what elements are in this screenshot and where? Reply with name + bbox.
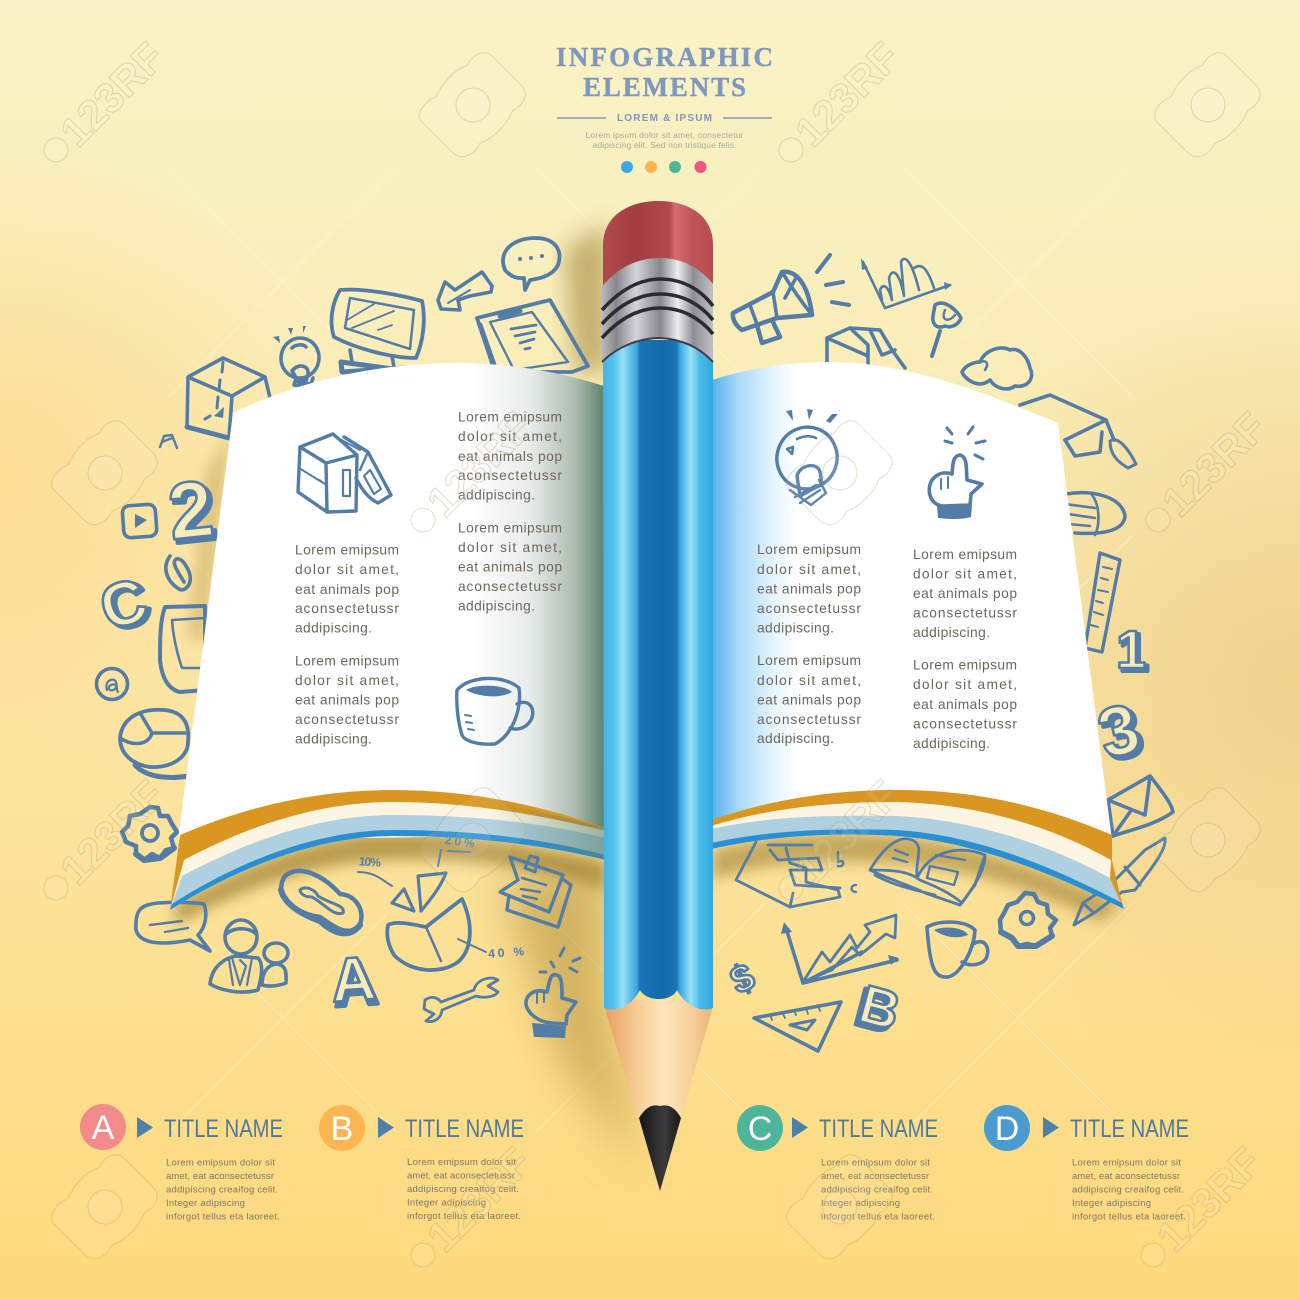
- legend item B: addipiscing creaifog celit.: [407, 1184, 519, 1195]
- icon: ruler: [1085, 553, 1120, 652]
- letter 2: 2: [164, 463, 218, 557]
- icon: graduation cap: [1020, 395, 1136, 468]
- colour dots: [621, 161, 706, 173]
- right page: [712, 362, 1112, 840]
- legend item C: Lorem emipsum dolor sit: [821, 1158, 930, 1168]
- watermarks: 123RF: [786, 33, 908, 156]
- legend item B: Lorem emipsum dolor sit: [407, 1157, 516, 1168]
- legend item C: addipiscing creaifog celit.: [821, 1184, 933, 1196]
- icon: gear: [122, 807, 177, 860]
- legend item A: TITLE NAME: [164, 1115, 283, 1143]
- letter B: B: [849, 977, 902, 1045]
- page text: left column 2: Lorem emipsum: [458, 520, 562, 536]
- page text: right column 1: [757, 542, 861, 746]
- letter 1: 1: [1116, 620, 1146, 680]
- page text: left column 2: Lorem emipsum: [458, 410, 562, 424]
- intro text: adipiscing elit. Sed non tristique felis.: [592, 140, 736, 150]
- labels 10% 20% 40%: 10%: [358, 854, 382, 870]
- legend item D: amet, eat aconsectetussr: [1072, 1171, 1180, 1182]
- icon: stairs block: [736, 842, 840, 907]
- letter 3: 3: [1094, 691, 1151, 776]
- subheading with rules: LOREM & IPSUM: [617, 113, 712, 124]
- legend item B: Integer adipiscing: [407, 1198, 486, 1208]
- page text: left column 2: dolor sit amet,: [458, 429, 562, 444]
- legend item A: amet, eat aconsectetussr: [166, 1171, 274, 1182]
- icon: back arrow: [438, 272, 492, 310]
- icon: books on page: [298, 434, 391, 512]
- doodle icons: left arc: [92, 238, 588, 1038]
- page text: left column 1: Lorem emipsum: [295, 654, 399, 668]
- icon: pie chart: [358, 850, 486, 970]
- watermarks: 123RF: [1148, 1138, 1270, 1261]
- page text: right column 2: Lorem emipsum: [913, 547, 1017, 562]
- page text: left column 1: aconsectetussr: [295, 712, 399, 727]
- page text: left column 1: addipiscing.: [295, 732, 372, 746]
- icon: infinity knot: [281, 871, 361, 933]
- doodle icons: right arc: [724, 255, 1173, 1051]
- page text: left column 2: dolor sit amet,: [458, 540, 562, 555]
- legend item D: Lorem emipsum dolor sit: [1072, 1158, 1181, 1168]
- page text: right column 2: eat animals pop: [913, 586, 1017, 601]
- icon: speech bubble: [503, 238, 559, 290]
- icon: clipboard: [477, 300, 588, 372]
- page text: right column 1: eat animals pop: [757, 692, 861, 708]
- icon: computer mouse: [120, 710, 188, 778]
- page text: left column 2: addipiscing.: [458, 488, 535, 502]
- shadows: [175, 222, 1122, 1170]
- icon: monitor: [332, 290, 424, 372]
- page text: right column 1: aconsectetussr: [757, 712, 861, 727]
- icon: stacked books: [827, 328, 905, 368]
- page text: left column 1: dolor sit amet,: [295, 562, 399, 577]
- icon: hand on page: [929, 427, 985, 519]
- page text: right column 2: [913, 547, 1017, 751]
- icon: play box: [122, 504, 157, 538]
- icon: circled a: [96, 668, 128, 700]
- page text: right column 2: addipiscing.: [913, 736, 990, 751]
- icon: cube: [187, 358, 271, 438]
- page text: right column 2: addipiscing.: [913, 625, 990, 640]
- ferrule: [602, 258, 713, 362]
- page text: right column 2: aconsectetussr: [913, 606, 1017, 620]
- page text: left column 1: [295, 542, 399, 746]
- page text: left column 2: aconsectetussr: [458, 579, 562, 594]
- page icons: [298, 409, 985, 744]
- icon: push pin: [932, 303, 961, 356]
- legend item D: inforgot tellus eta laoreet.: [1072, 1212, 1186, 1222]
- page text: left column 2: eat animals pop: [458, 449, 562, 464]
- watermarks: 123RF: [51, 771, 173, 894]
- eraser: [603, 201, 713, 295]
- page text: left column 2: addipiscing.: [458, 598, 535, 614]
- legend item C: inforgot tellus eta laoreet.: [821, 1212, 935, 1222]
- intro text: [586, 130, 744, 150]
- legend item D: addipiscing creaifog celit.: [1072, 1184, 1184, 1196]
- page text: right column 2: eat animals pop: [913, 697, 1017, 712]
- labels 10% 20% 40%: [358, 833, 525, 961]
- page text: left column 1: eat animals pop: [295, 582, 399, 597]
- icon: envelope: [1108, 776, 1173, 836]
- page text: left column 1: addipiscing.: [295, 620, 372, 636]
- legend item D: D: [995, 1110, 1019, 1148]
- legend item A: A: [92, 1109, 115, 1147]
- page text: right column 1: dolor sit amet,: [757, 673, 861, 688]
- letter 1: 1: [1119, 623, 1149, 683]
- legend item C: C: [748, 1110, 772, 1148]
- page text: left column 2: eat animals pop: [458, 560, 562, 574]
- page text: right column 2: dolor sit amet,: [913, 677, 1017, 692]
- intro text: Lorem ipsum dolor sit amet, consectetur: [586, 130, 744, 140]
- page text: left column 2: aconsectetussr: [458, 468, 562, 483]
- page text: right column 2: Lorem emipsum: [913, 658, 1017, 672]
- icon: growth chart: [781, 915, 899, 983]
- icon: wrench: [424, 978, 498, 1022]
- watermarks: 123RF: [418, 1138, 540, 1261]
- heading: ELEMENTS: [583, 72, 746, 102]
- legend item A: [80, 1104, 283, 1222]
- icon: letter a small: [160, 435, 177, 448]
- watermarks: 123RF: [418, 403, 540, 526]
- left page: [178, 363, 604, 840]
- page text: right column 2: dolor sit amet,: [913, 566, 1017, 582]
- dollar sign: $: [724, 956, 761, 1003]
- icon: coffee cup: [927, 922, 988, 977]
- legend item A: Integer adipiscing: [166, 1198, 245, 1209]
- legend item B: [319, 1105, 524, 1222]
- icon: eraser: [1065, 493, 1125, 535]
- icon: pen: [1074, 838, 1165, 925]
- page text: right column 1: Lorem emipsum: [757, 653, 861, 668]
- legend item D: [984, 1105, 1189, 1222]
- page text: left column 1: Lorem emipsum: [295, 542, 399, 558]
- page text: right column 1: dolor sit amet,: [757, 562, 861, 577]
- page text: left column 1: eat animals pop: [295, 692, 399, 708]
- legend item A: Lorem emipsum dolor sit: [166, 1158, 275, 1168]
- right page edge layers: [711, 790, 1124, 909]
- letter A: A: [329, 944, 378, 1016]
- legend item A: addipiscing creaifog celit.: [166, 1184, 278, 1196]
- watermarks: 123RF: [51, 33, 173, 156]
- page text: left column 1: aconsectetussr: [295, 601, 399, 616]
- labels 10% 20% 40%: 20%: [444, 833, 476, 851]
- legend item B: TITLE NAME: [405, 1115, 524, 1143]
- page text: right column 1: addipiscing.: [757, 620, 834, 636]
- left page edge layers: [170, 790, 606, 910]
- letter A: A: [331, 949, 380, 1021]
- wood tip: [604, 1000, 713, 1190]
- icon: set square: [754, 1002, 841, 1051]
- legend item C: Integer adipiscing: [821, 1198, 900, 1209]
- labels 10% 20% 40%: 40 %: [488, 944, 525, 961]
- page text: left column 2: [458, 410, 562, 614]
- icon: bar chart: [861, 258, 952, 308]
- watermarks: 123RF: [1153, 403, 1275, 526]
- letter 3: 3: [1090, 688, 1147, 773]
- icon: cloud: [962, 348, 1032, 389]
- icon: megaphone: [733, 255, 849, 343]
- letter 2: 2: [167, 467, 221, 560]
- title block: [556, 42, 773, 173]
- legend item C: [737, 1105, 938, 1222]
- page text: right column 1: Lorem emipsum: [757, 542, 861, 557]
- icon: cup on page: [457, 678, 533, 744]
- letter C: C: [95, 567, 159, 646]
- icon: bulb on page: [768, 409, 846, 505]
- icon: business people: [210, 920, 288, 992]
- legend item D: TITLE NAME: [1070, 1115, 1189, 1143]
- icon: speech note: [136, 902, 210, 951]
- graphite lead: [639, 1105, 681, 1191]
- icons small b c: [838, 852, 856, 892]
- page text: right column 2: aconsectetussr: [913, 716, 1017, 732]
- icon: tablet: [160, 606, 205, 692]
- page text: right column 1: addipiscing.: [757, 731, 834, 746]
- watermarks: 123RF: [786, 771, 908, 894]
- legend item A: inforgot tellus eta laoreet.: [166, 1212, 280, 1222]
- legend item B: amet, eat aconsectetussr: [407, 1170, 515, 1182]
- page text: right column 1: eat animals pop: [757, 582, 861, 596]
- heading: INFOGRAPHIC: [556, 42, 773, 72]
- letter C: C: [92, 565, 155, 644]
- icon: paper clip: [166, 556, 190, 590]
- legend item B: inforgot tellus eta laoreet.: [407, 1211, 521, 1222]
- pencil: [602, 201, 713, 1191]
- book: [170, 362, 1124, 910]
- legend item C: TITLE NAME: [819, 1115, 938, 1143]
- heading: [556, 42, 773, 102]
- legend item B: B: [331, 1110, 353, 1148]
- blue barrel: [603, 340, 713, 1009]
- icon: gear right: [1000, 893, 1056, 946]
- icon: light bulb: [273, 326, 322, 387]
- icon: open book: [870, 839, 985, 905]
- page text: right column 1: aconsectetussr: [757, 601, 861, 616]
- legend item C: amet, eat aconsectetussr: [821, 1171, 929, 1182]
- legend item D: Integer adipiscing: [1072, 1198, 1151, 1209]
- icon: pointing hand: [526, 948, 580, 1038]
- page text: left column 1: dolor sit amet,: [295, 673, 399, 688]
- icon: sticky notes: [500, 856, 571, 927]
- letter B: B: [853, 974, 906, 1042]
